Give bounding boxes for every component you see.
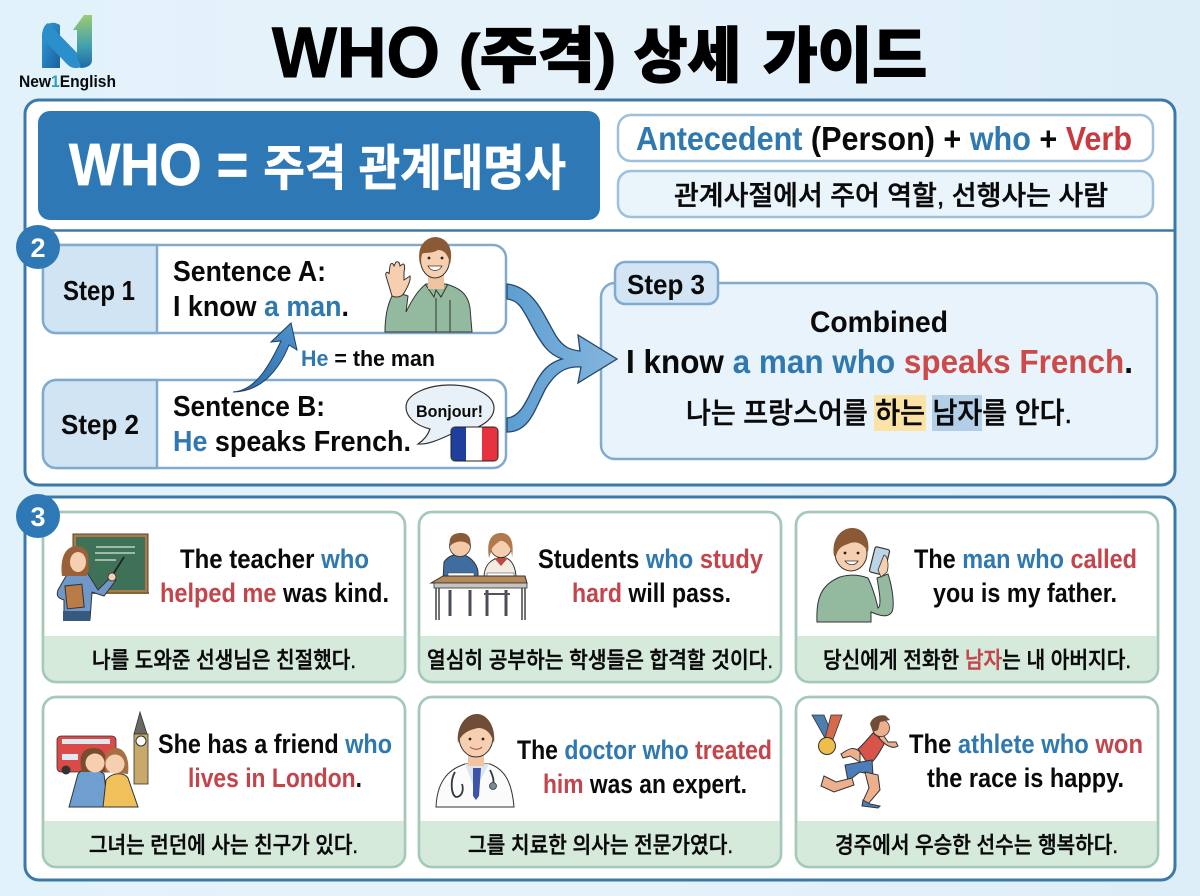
icon: students at desk — [431, 533, 527, 620]
text: combined sentence: 나는 프랑스어를 하는 남자를 안다. — [686, 397, 1072, 430]
card: man on phone: The man who called — [914, 544, 1137, 574]
description box — [618, 171, 1153, 217]
badge: 3 — [16, 494, 60, 538]
arrow: big merge arrow — [507, 284, 617, 432]
icon: waving man — [385, 237, 472, 332]
card: doctor — [419, 697, 781, 867]
icon: teacher at blackboard — [57, 534, 149, 621]
tab: Step 3 — [615, 262, 718, 304]
text: combined sentence: Combined — [810, 306, 948, 339]
highlight: 남자 — [932, 395, 982, 431]
card: man on phone: you is my father. — [933, 578, 1117, 608]
title: WHO — [272, 14, 440, 93]
card: man on phone — [796, 512, 1158, 682]
icon: man on phone — [817, 528, 893, 622]
step 2 box: He speaks French. — [173, 426, 411, 458]
card: teacher: helped me was kind. — [160, 578, 389, 608]
step 1 box: I know a man. — [173, 291, 349, 323]
title: (주격) — [459, 23, 616, 90]
formula box: Antecedent (Person) + who + Verb — [636, 120, 1132, 157]
step 2 box: Step 2 — [61, 409, 139, 440]
step 1 box: Sentence A: — [173, 256, 326, 288]
card: friend in London: 그녀는 런던에 사는 친구가 있다. — [89, 833, 358, 858]
badge: 2: 2 — [30, 233, 46, 263]
panel: definition and steps — [25, 100, 1175, 485]
card: teacher — [43, 512, 405, 682]
card: students: hard will pass. — [572, 578, 731, 608]
card: students: Students who study — [538, 544, 763, 574]
panel: step 3 combined — [601, 283, 1157, 459]
icon: friends with bus and tower — [57, 712, 148, 807]
panel: examples — [25, 497, 1175, 880]
card: teacher: 나를 도와준 선생님은 친절했다. — [92, 648, 356, 673]
card: man on phone: 당신에게 전화한 남자는 내 아버지다. — [823, 648, 1131, 673]
card: athlete: the race is happy. — [927, 763, 1124, 793]
logo: New1English — [19, 15, 116, 91]
icon: doctor — [436, 714, 514, 807]
card: doctor: him was an expert. — [543, 769, 747, 799]
step 2 box: Sentence B: — [173, 391, 325, 423]
badge: 2 — [16, 225, 60, 269]
text: combined sentence: I know a man who speaks French. — [626, 343, 1133, 380]
tab: Step 3: Step 3 — [627, 269, 705, 300]
icon: Bonjour speech bubble: Bonjour! — [416, 403, 483, 421]
card: students — [419, 512, 781, 682]
card: athlete — [796, 697, 1158, 867]
card: students: 열심히 공부하는 학생들은 합격할 것이다. — [427, 648, 773, 673]
title — [272, 14, 927, 93]
title: 가이드 — [763, 23, 927, 90]
step 2 box — [43, 380, 506, 468]
icon: French flag — [451, 427, 498, 461]
banner: WHO definition: WHO = 주격 관계대명사 — [69, 132, 566, 198]
card: doctor: The doctor who treated — [517, 735, 772, 765]
card: friend in London: lives in London. — [188, 763, 362, 793]
highlight: 하는 — [874, 395, 926, 431]
card: athlete: The athlete who won — [909, 729, 1143, 759]
banner: WHO definition — [38, 111, 600, 220]
icon: medal and runner — [812, 715, 898, 808]
card: friend in London: She has a friend who — [158, 729, 392, 759]
step 1 box — [43, 245, 506, 333]
card: athlete: 경주에서 우승한 선수는 행복하다. — [835, 833, 1118, 858]
card: teacher: The teacher who — [180, 544, 369, 574]
title: 상세 — [634, 23, 741, 90]
logo: New1English: New1English — [19, 73, 116, 91]
badge: 3: 3 — [30, 502, 46, 532]
card: doctor: 그를 치료한 의사는 전문가였다. — [468, 833, 733, 858]
arrow: he refers to a man — [233, 323, 297, 392]
label: He = the man: He = the man — [301, 346, 435, 371]
step 1 box: Step 1 — [63, 275, 135, 306]
text: combined sentence — [626, 306, 1133, 430]
description box: 관계사절에서 주어 역할, 선행사는 사람 — [674, 181, 1108, 211]
icon: Bonjour speech bubble — [406, 385, 494, 444]
card: friend in London — [43, 697, 405, 867]
